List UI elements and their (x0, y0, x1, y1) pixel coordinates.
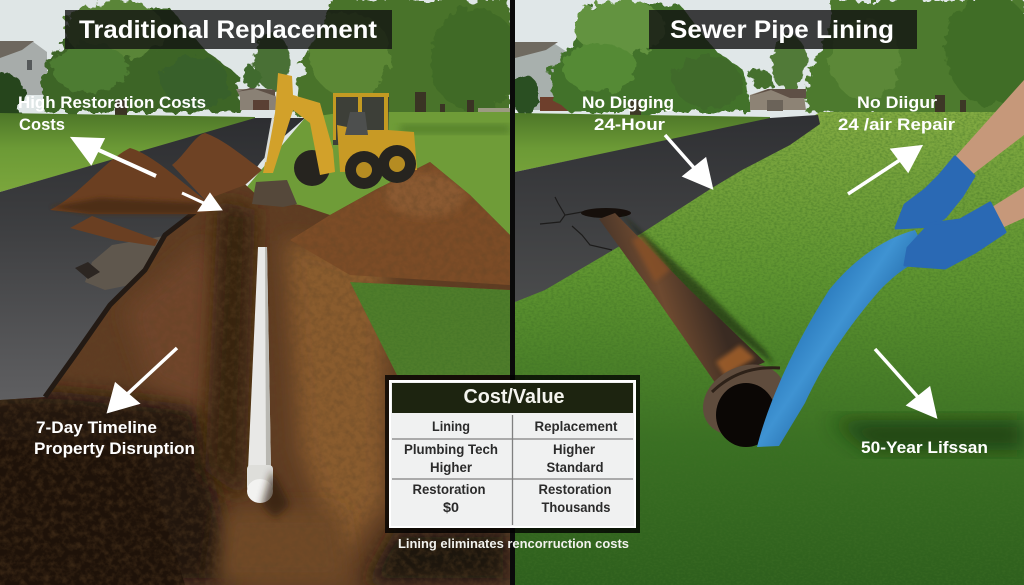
heading: sewer pipe lining: Sewer Pipe Lining (670, 16, 894, 44)
dirt pile, far (172, 133, 262, 200)
label: repair: 24 /air Repair (838, 116, 956, 134)
trees, background (511, 0, 1024, 120)
arrow: no digging (665, 135, 711, 187)
old cast-iron pipe (599, 213, 797, 449)
lawn, right of driveway (240, 112, 510, 385)
row: restoration: $0 (443, 500, 459, 515)
row: plumbing: Standard (546, 460, 604, 475)
hole in asphalt (581, 208, 631, 218)
PVC pipe (247, 247, 273, 503)
arrow: high restoration costs (74, 139, 156, 176)
excavator (252, 73, 417, 207)
distant house (750, 89, 806, 111)
driveway asphalt (0, 118, 305, 400)
long lawn shadow (830, 420, 1024, 450)
lawn, left of driveway (515, 113, 770, 172)
label: high restoration costs: Costs (19, 116, 65, 134)
label: high restoration costs: High Restoration Costs (18, 94, 206, 112)
label: lifespan: 50-Year Lifssan (861, 439, 988, 457)
panel: sewer pipe lining scene (511, 0, 1024, 585)
label: timeline and disruption: Property Disruption (34, 440, 195, 458)
dark rubble (75, 262, 100, 279)
table caption: Lining eliminates rencorruction costs (398, 537, 629, 551)
label: timeline and disruption: 7-Day Timeline (36, 419, 157, 437)
comparison table: cost and value (385, 375, 640, 533)
table header: Cost/Value (464, 386, 564, 408)
soil, trench and mounds (0, 150, 510, 585)
row: restoration: Thousands (542, 500, 610, 515)
row: plumbing: Higher (430, 460, 473, 475)
row: column heads (432, 419, 618, 434)
pipe shadow on lawn (620, 212, 775, 365)
row: plumbing: Higher (553, 442, 596, 457)
lower lawn patch (350, 282, 510, 375)
row: column heads: Replacement (534, 419, 618, 434)
heading: sewer pipe lining (649, 10, 917, 49)
row: column heads: Lining (432, 419, 470, 434)
arrow: to trench (182, 193, 220, 210)
arrow: lifespan (875, 349, 935, 416)
heading: traditional replacement: Traditional Replacement (79, 16, 378, 44)
row: restoration (412, 482, 612, 515)
house, left background (515, 42, 568, 111)
asphalt cracks (540, 197, 612, 250)
centre divider (510, 0, 515, 585)
distant house (236, 88, 276, 110)
blue gloves (896, 157, 1005, 268)
broken asphalt patch (85, 236, 161, 290)
arrow: seven-day timeline (109, 348, 177, 411)
blue liner hose (757, 230, 930, 447)
pipe shadow (262, 470, 290, 518)
dirt pile, near (50, 148, 218, 214)
table header (392, 383, 633, 413)
trench edge against asphalt (45, 212, 195, 397)
tree trunks (115, 92, 474, 115)
label: high restoration costs (19, 96, 206, 130)
label: repair: No Diigur (857, 94, 938, 112)
row: plumbing (404, 442, 604, 475)
row: restoration: Restoration (538, 482, 612, 497)
grass texture (515, 112, 1024, 362)
label: no digging: No Digging (582, 94, 674, 112)
arrow: repair (848, 147, 920, 194)
label: no digging (582, 94, 674, 134)
row: plumbing: Plumbing Tech (404, 442, 498, 457)
label: repair (838, 94, 956, 134)
label: no digging: 24-Hour (594, 116, 666, 134)
tree trunks (630, 95, 966, 115)
heading: traditional replacement (65, 10, 392, 49)
row: restoration: Restoration (412, 482, 486, 497)
arms (955, 80, 1024, 228)
label: timeline and disruption (34, 419, 195, 458)
lawn, far left (0, 113, 255, 192)
main lawn (515, 112, 1024, 585)
panel: traditional replacement scene (0, 0, 520, 585)
driveway asphalt (515, 115, 820, 302)
trees, left background (0, 0, 520, 125)
asphalt chunk (70, 216, 158, 246)
house, left background (0, 41, 47, 95)
